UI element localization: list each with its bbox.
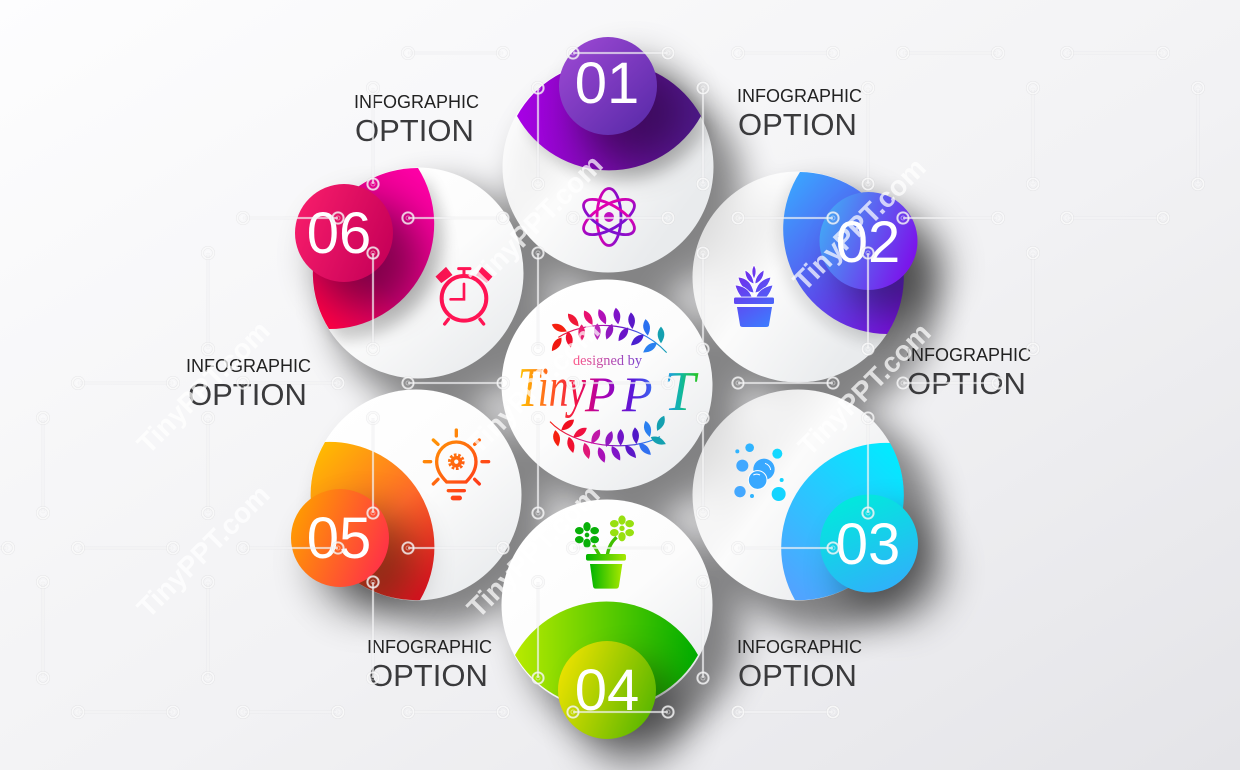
watermarks: TinyPPT.com	[461, 479, 606, 624]
lens shadow 02	[778, 180, 899, 342]
logo wreath: top branch	[549, 307, 667, 355]
watermarks: TinyPPT.com	[464, 149, 609, 294]
colour lens 02	[783, 172, 904, 334]
colour lens 05	[311, 442, 434, 600]
white circle 03	[692, 390, 904, 600]
shadows of the white circles	[330, 78, 936, 740]
label 06: INFOGRAPHIC	[186, 356, 311, 376]
white circle 04	[502, 500, 712, 710]
label 05: INFOGRAPHIC	[367, 637, 492, 657]
badge 02: 02	[836, 210, 900, 275]
label 05	[367, 637, 492, 693]
panel 06	[312, 168, 524, 378]
lens shadow 01	[527, 75, 709, 181]
logo text: PPT: T	[664, 361, 699, 423]
logo text: PPT: P	[621, 366, 653, 422]
label 04	[737, 637, 862, 693]
panel 04	[502, 500, 712, 710]
label 04: OPTION	[738, 658, 857, 693]
badge 06: 06	[307, 201, 371, 266]
label 05: OPTION	[369, 658, 488, 693]
white circle 05	[310, 390, 522, 600]
label 04: INFOGRAPHIC	[737, 637, 862, 657]
panel 05	[310, 390, 522, 600]
panel: centre logo	[502, 280, 712, 490]
watermarks: TinyPPT.com	[787, 152, 932, 297]
shadows of the number circles	[312, 60, 946, 768]
label 02	[737, 86, 862, 142]
badge 03: 03	[836, 512, 900, 577]
badge 06	[295, 184, 393, 282]
white circle 06	[312, 168, 524, 378]
badge 02	[820, 192, 918, 290]
colour lens 03	[781, 443, 904, 600]
icon: atom	[578, 188, 640, 246]
badge 04: 04	[575, 658, 639, 723]
badge 01	[559, 37, 657, 135]
watermarks: TinyPPT.com	[131, 479, 276, 624]
icon: potted plant	[734, 265, 774, 327]
label 01: INFOGRAPHIC	[354, 92, 479, 112]
label 02: OPTION	[738, 107, 857, 142]
logo text: Tiny: Tiny	[518, 357, 586, 419]
logo text: PPT	[584, 361, 699, 423]
lens shadow 06	[323, 180, 444, 341]
logo wreath: bottom branch	[550, 414, 667, 464]
label 01	[354, 92, 479, 148]
white circle 02	[692, 172, 904, 382]
logo text: PPT: P	[584, 366, 616, 422]
label 02: INFOGRAPHIC	[737, 86, 862, 106]
colour lens 06	[313, 168, 434, 329]
badge 04	[558, 641, 656, 739]
panel 03	[692, 390, 904, 600]
badge 01: 01	[575, 51, 639, 116]
logo text: designed by: designed by	[573, 353, 643, 369]
badge 05	[291, 489, 389, 587]
icon: bubbles	[734, 443, 786, 501]
colour lens 01	[517, 62, 701, 170]
label 03: INFOGRAPHIC	[906, 345, 1031, 365]
watermarks	[131, 149, 937, 624]
label 01: OPTION	[355, 113, 474, 148]
watermarks: TinyPPT.com	[792, 317, 937, 462]
badge 05: 05	[307, 506, 371, 571]
icon: alarm clock	[436, 267, 492, 324]
label 06	[186, 356, 311, 412]
watermarks: TinyPPT.com	[131, 315, 276, 460]
panel 02	[692, 172, 904, 382]
label 06: OPTION	[188, 377, 307, 412]
icon: light bulb with gear	[424, 430, 489, 498]
centre white circle	[502, 280, 712, 490]
label 03: OPTION	[907, 366, 1026, 401]
white circle 01	[502, 62, 714, 272]
watermarks: TinyPPT.com	[461, 315, 606, 460]
label 03	[906, 345, 1031, 401]
panel 01	[502, 62, 714, 272]
icon: flower pot	[575, 515, 634, 589]
colour lens 04	[515, 602, 698, 708]
badge 03	[820, 494, 918, 592]
